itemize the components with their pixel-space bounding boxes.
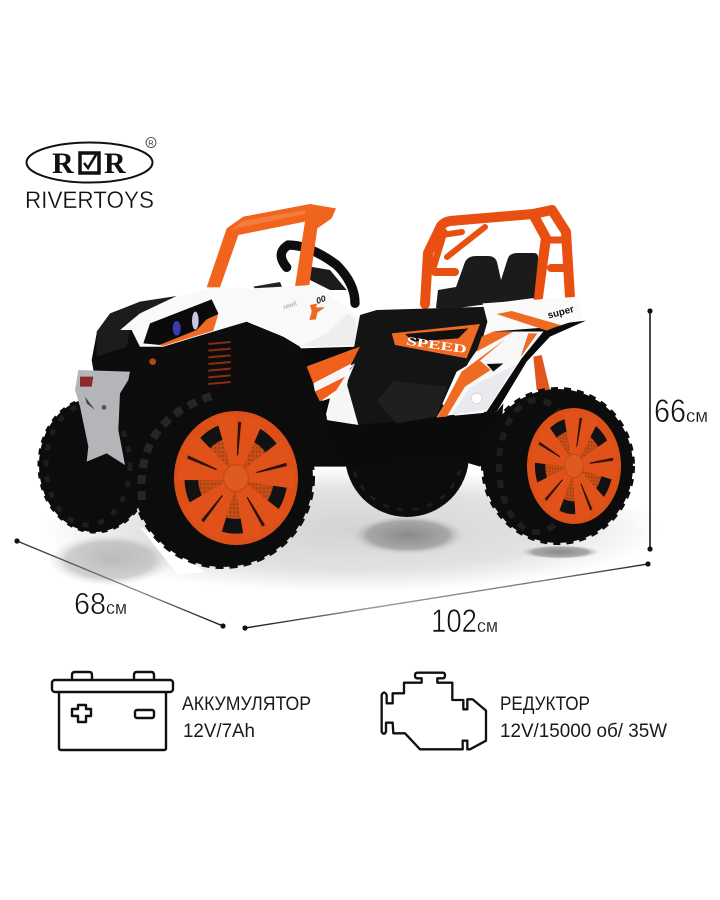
silver bumper guard: [75, 370, 130, 465]
orange bar: [207, 204, 336, 287]
headlight: [143, 299, 218, 345]
logo: Rivertoys: R: [148, 138, 154, 148]
car body: front section: 00: [315, 293, 327, 306]
logo: Rivertoys: R: [52, 147, 74, 180]
front roll bar and steering wheel: [207, 204, 355, 303]
vehicle illustration: [39, 204, 633, 567]
hood dark band: [97, 296, 177, 357]
rear roll cage: [425, 210, 570, 304]
dimension line: height 66 cm: [647, 308, 653, 552]
speed badge: [392, 324, 480, 358]
far rear wheel: [345, 393, 469, 517]
text: battery spec: 12V/7Ah: [183, 721, 255, 742]
logo: Rivertoys: RIVERTOYS: [25, 187, 154, 214]
floor reflection: [40, 468, 660, 592]
label: 68 cm: см: [106, 598, 127, 618]
hood: [120, 285, 358, 348]
rear shock: [533, 355, 550, 390]
icon: battery: [52, 672, 173, 750]
text: gearbox spec: РЕДУКТОР: [500, 694, 590, 715]
side graphic: [437, 332, 543, 417]
label: 66 cm: 66: [654, 393, 686, 429]
hood logo: [309, 303, 325, 320]
dimension line: width 68 cm: [14, 538, 226, 629]
near rear wheel: [483, 389, 633, 543]
car body: front section: rewil: [282, 300, 298, 311]
label: super: super: [547, 304, 575, 322]
label: 66 cm: [654, 393, 708, 429]
suspension spring: [208, 342, 231, 384]
rear white panel: [483, 297, 583, 332]
text: gearbox spec: [500, 694, 667, 742]
icon: engine: [382, 673, 486, 749]
label: 102 cm: см: [477, 616, 498, 636]
label: 68 cm: [74, 586, 127, 621]
logo: Rivertoys: R: [104, 147, 126, 180]
black chassis: [92, 322, 345, 467]
text: battery spec: АККУМУЛЯТОР: [182, 694, 311, 715]
text: battery spec: [182, 694, 311, 742]
lower black body: [345, 307, 492, 425]
label: SPEED: SPEED: [406, 334, 468, 356]
car body: front section: [92, 285, 358, 467]
dimension line: length 102 cm: [242, 561, 651, 631]
door stripes: [300, 347, 360, 425]
logo: Rivertoys: [25, 138, 156, 214]
label: 66 cm: см: [686, 406, 708, 426]
car body: rear section: [327, 297, 586, 467]
seats: [436, 253, 538, 309]
steering wheel: [281, 245, 355, 303]
sill: [327, 403, 503, 467]
label: 68 cm: 68: [74, 586, 106, 621]
text: gearbox spec: 12V/15000 об/ 35W: [500, 721, 667, 742]
windshield piece: [300, 313, 358, 347]
far front wheel: [39, 398, 151, 532]
label: 102 cm: 102: [431, 603, 477, 639]
near front wheel: [133, 389, 313, 567]
rear fender: [483, 321, 586, 413]
